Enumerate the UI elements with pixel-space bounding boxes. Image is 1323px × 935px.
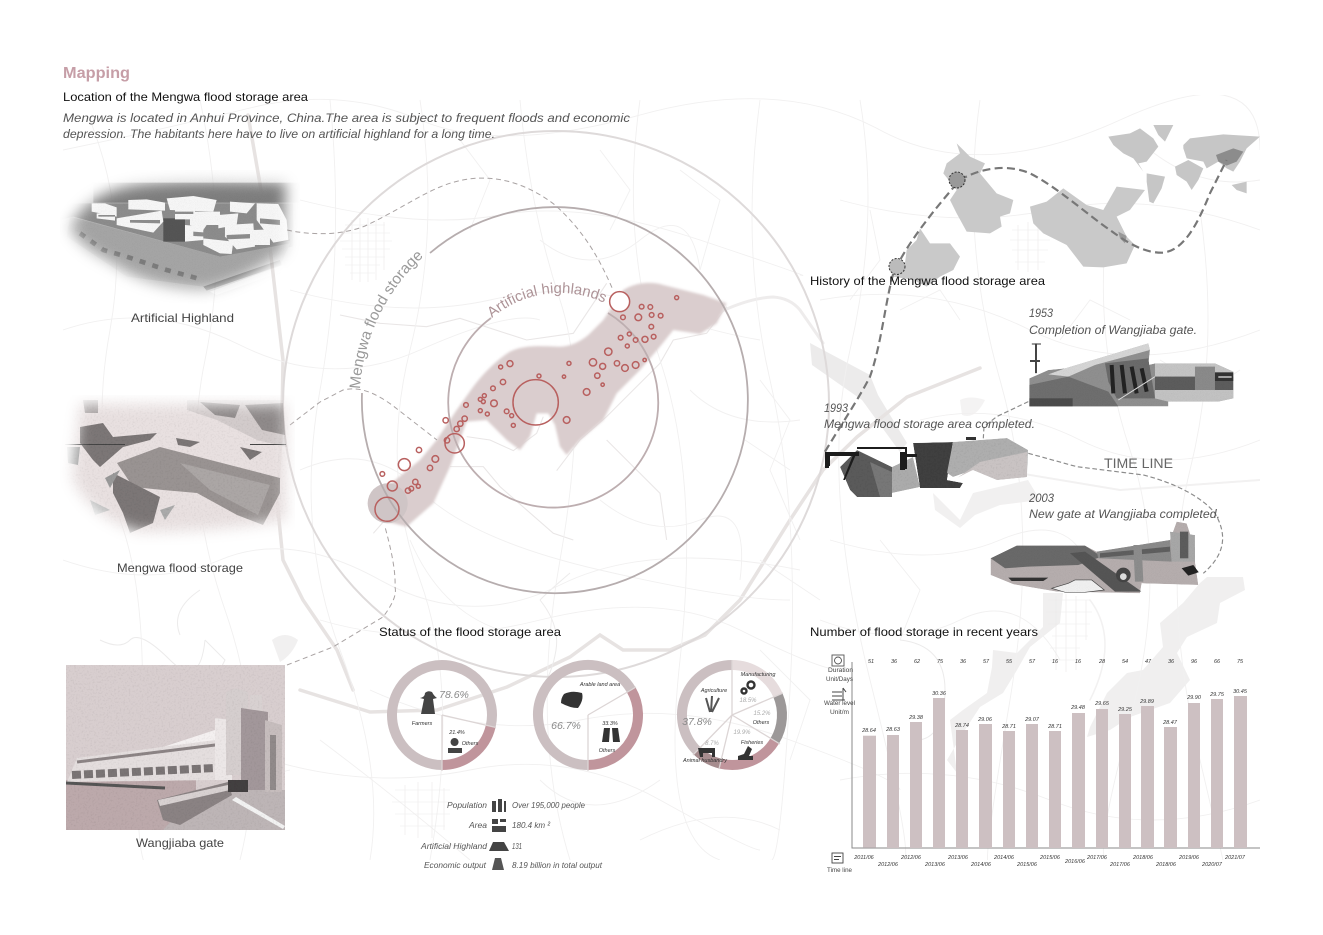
duration values — [868, 659, 1244, 665]
water level values: 29.90 — [1186, 695, 1202, 701]
value: arable share: 66.7% — [551, 720, 581, 732]
label: Artificial highlands: Artificial highlands — [489, 282, 606, 318]
intro text: depression. The habitants here have to live on artificial highland for a long time. — [63, 127, 495, 141]
stat: population: Population — [447, 800, 487, 810]
duration values: 57 — [1029, 659, 1036, 665]
photo collage 1953 — [1029, 343, 1233, 406]
value: other land share: 33.3% — [602, 721, 618, 727]
infographic canvas — [63, 66, 1260, 872]
outer ring — [283, 131, 829, 677]
label: fisheries: Fisheries — [741, 740, 763, 746]
date labels: 2012/06 — [877, 862, 899, 868]
date labels: 2017/06 — [1109, 862, 1131, 868]
duration values: 51 — [868, 659, 874, 665]
date labels: 2014/06 — [993, 855, 1015, 861]
water level values: 30.36 — [932, 691, 947, 697]
donut chart: population occupation — [392, 665, 496, 771]
bars — [863, 696, 1247, 848]
stat: artificial highland — [420, 841, 522, 851]
icon: others person — [448, 738, 462, 753]
water level values: 29.65 — [1094, 701, 1110, 707]
intro text: Mengwa is located in Anhui Province, China.The area is subject to frequent floods and economic — [63, 111, 630, 125]
value: agriculture share: 37.8% — [682, 716, 712, 728]
label: animal husbandry: Animal husbandry — [682, 758, 728, 764]
timeline entry 1993 — [824, 401, 1035, 431]
duration values: 47 — [1145, 659, 1152, 665]
key statistics — [420, 799, 603, 870]
photo: Mengwa flood storage — [60, 395, 295, 545]
icon: wheat — [706, 696, 719, 712]
date labels: 2018/06 — [1132, 855, 1154, 861]
river banks south of flood area — [340, 283, 727, 540]
value: fisheries share: 19.9% — [733, 730, 751, 736]
icon: gears — [742, 682, 754, 694]
street grids — [340, 218, 1092, 838]
stat: economic output: Economic output — [424, 860, 487, 870]
bar chart: flood storage water level — [824, 655, 1260, 874]
stat: population — [447, 799, 585, 812]
stat: economic output — [424, 858, 603, 870]
donut chart: industry — [682, 660, 783, 769]
water level values: 29.07 — [1024, 717, 1040, 723]
stat: artificial highland: 131 — [512, 841, 522, 851]
label: other land: Others — [599, 748, 615, 754]
dashed leader lines from photos — [287, 178, 613, 665]
timeline entry 1953 — [1029, 306, 1197, 337]
photo: artificial highland — [64, 174, 296, 298]
map: world — [1108, 125, 1260, 203]
icon: water level — [832, 688, 846, 700]
caption: Artificial Highland: Artificial Highland — [131, 311, 234, 325]
locator maps — [893, 125, 1260, 287]
date labels: 2019/06 — [1178, 855, 1200, 861]
donut chart: land use — [538, 665, 638, 771]
date labels: 2011/06 — [853, 855, 875, 861]
stat: artificial highland: Artificial Highland — [420, 841, 487, 851]
value: animal share: 8.7% — [705, 741, 719, 747]
intro text — [63, 111, 630, 141]
value: others share: 21.4% — [448, 730, 465, 736]
axes — [852, 662, 1260, 848]
duration values: 36 — [891, 659, 898, 665]
value: others share: 15.2% — [753, 711, 771, 717]
label: others: Others — [462, 741, 478, 747]
label: water level: Unit/m — [830, 709, 849, 716]
label: TIME LINE: TIME LINE — [1104, 455, 1173, 471]
value: manufacturing share: 18.5% — [739, 698, 757, 704]
label: duration: Unit/Days — [826, 676, 854, 683]
water level values: 29.89 — [1139, 699, 1154, 705]
icon: road — [602, 728, 620, 742]
water level values: 28.64 — [861, 728, 876, 734]
map: China highlight on world — [1216, 148, 1243, 166]
date labels: 2014/06 — [970, 862, 992, 868]
water level values: 29.06 — [977, 717, 993, 723]
icon: farmer — [420, 691, 437, 714]
water level values: 29.25 — [1117, 707, 1133, 713]
label: arable land: Arable land area — [579, 682, 620, 688]
flood storage area shape — [368, 283, 727, 527]
date labels: 2015/06 — [1039, 855, 1061, 861]
water level values: 29.75 — [1209, 692, 1225, 698]
water level values: 28.71 — [1047, 724, 1062, 730]
duration values: 75 — [1237, 659, 1244, 665]
water level values: 28.74 — [954, 723, 969, 729]
label: manufacturing: Manufacturing — [741, 672, 776, 678]
label: others: Others — [753, 720, 769, 726]
label: agriculture: Agriculture — [700, 688, 727, 694]
timeline entry 1993: Mengwa flood storage area completed. — [824, 417, 1035, 431]
title: Mapping — [63, 65, 130, 82]
duration values: 36 — [1168, 659, 1175, 665]
artificial highland markers — [375, 292, 679, 521]
background road map — [63, 94, 1260, 880]
dashed route line — [825, 160, 1227, 452]
icon: calendar — [832, 853, 843, 863]
icon: fishing — [738, 746, 753, 760]
pale river — [248, 115, 1260, 712]
water level values — [861, 689, 1248, 734]
duration values: 16 — [1052, 659, 1059, 665]
ring: Mengwa flood storage — [362, 207, 748, 593]
date labels: 2015/06 — [1016, 862, 1038, 868]
map: China, Anhui and Mengwa — [893, 143, 1145, 287]
label: duration — [826, 667, 854, 683]
stat: area — [468, 819, 551, 832]
heading: status: Status of the flood storage area — [379, 625, 561, 639]
water level values: 28.63 — [885, 727, 901, 733]
stat: population: Over 195,000 people — [512, 800, 585, 810]
label: water level — [824, 700, 856, 716]
duration values: 28 — [1098, 659, 1106, 665]
heading: history: History of the Mengwa flood storage area — [810, 274, 1045, 288]
water level values: 28.47 — [1162, 720, 1178, 726]
caption: Wangjiaba gate: Wangjiaba gate — [136, 836, 224, 850]
date labels: 2018/06 — [1155, 862, 1177, 868]
duration values: 36 — [960, 659, 967, 665]
photo collage 1993 — [825, 437, 1028, 497]
icon: cow — [698, 748, 715, 757]
caption: Mengwa flood storage: Mengwa flood storage — [117, 561, 243, 575]
water level values: 29.48 — [1070, 705, 1086, 711]
date labels: 2013/06 — [947, 855, 969, 861]
route marker: Mengwa — [889, 258, 905, 274]
label: time line: Time line — [827, 867, 852, 874]
duration values: 54 — [1122, 659, 1128, 665]
photo: Wangjiaba gate — [66, 665, 285, 830]
date labels: 2021/07 — [1224, 855, 1246, 861]
stat: area: Area — [468, 820, 487, 830]
heading: number of flood storage: Number of flood storage in recent years — [810, 625, 1038, 639]
water level values: 30.45 — [1233, 689, 1248, 695]
water level values: 29.38 — [908, 715, 924, 721]
timeline entry 2003: 2003 — [1028, 491, 1054, 505]
label: Mengwa flood storage: Mengwa flood storage — [350, 252, 422, 388]
timeline entry 1953: 1953 — [1029, 306, 1053, 320]
label: duration: Duration — [828, 667, 853, 674]
photo collage 2003 — [991, 522, 1199, 593]
icon: clock — [832, 655, 844, 666]
water bodies — [272, 343, 1245, 773]
water level values: 28.71 — [1001, 724, 1016, 730]
road lines — [63, 94, 1260, 880]
value: farmers share: 78.6% — [439, 689, 469, 701]
date labels — [853, 855, 1246, 868]
timeline entry 2003: New gate at Wangjiaba completed. — [1029, 507, 1220, 521]
duration values: 96 — [1191, 659, 1198, 665]
duration values: 62 — [914, 659, 920, 665]
stat: economic output: 8.19 billion in total output — [512, 860, 603, 870]
date labels: 2016/06 — [1064, 859, 1086, 865]
grey origin circle — [368, 483, 408, 523]
timeline entry 2003 — [1028, 491, 1220, 521]
duration values: 75 — [937, 659, 944, 665]
duration values: 66 — [1214, 659, 1221, 665]
date labels: 2020/07 — [1201, 862, 1223, 868]
date labels: 2013/06 — [924, 862, 946, 868]
timeline entry 1953: Completion of Wangjiaba gate. — [1029, 323, 1197, 337]
duration values: 57 — [983, 659, 990, 665]
route marker: Anhui — [949, 172, 965, 188]
label: water level: Water level — [824, 700, 856, 707]
icon: arable land — [561, 692, 582, 708]
stat: area: 180.4 km ² — [512, 820, 551, 830]
timeline dashed connectors — [983, 402, 1223, 573]
winding lower rivers — [100, 573, 945, 740]
label: farmers: Farmers — [412, 721, 432, 727]
duration values: 55 — [1006, 659, 1013, 665]
subtitle: location: Location of the Mengwa flood storage area — [63, 90, 308, 104]
ring: Artificial highlands — [448, 313, 658, 508]
timeline entry 1993: 1993 — [824, 401, 848, 415]
duration values: 16 — [1075, 659, 1082, 665]
date labels: 2017/06 — [1086, 855, 1108, 861]
date labels: 2012/06 — [900, 855, 922, 861]
